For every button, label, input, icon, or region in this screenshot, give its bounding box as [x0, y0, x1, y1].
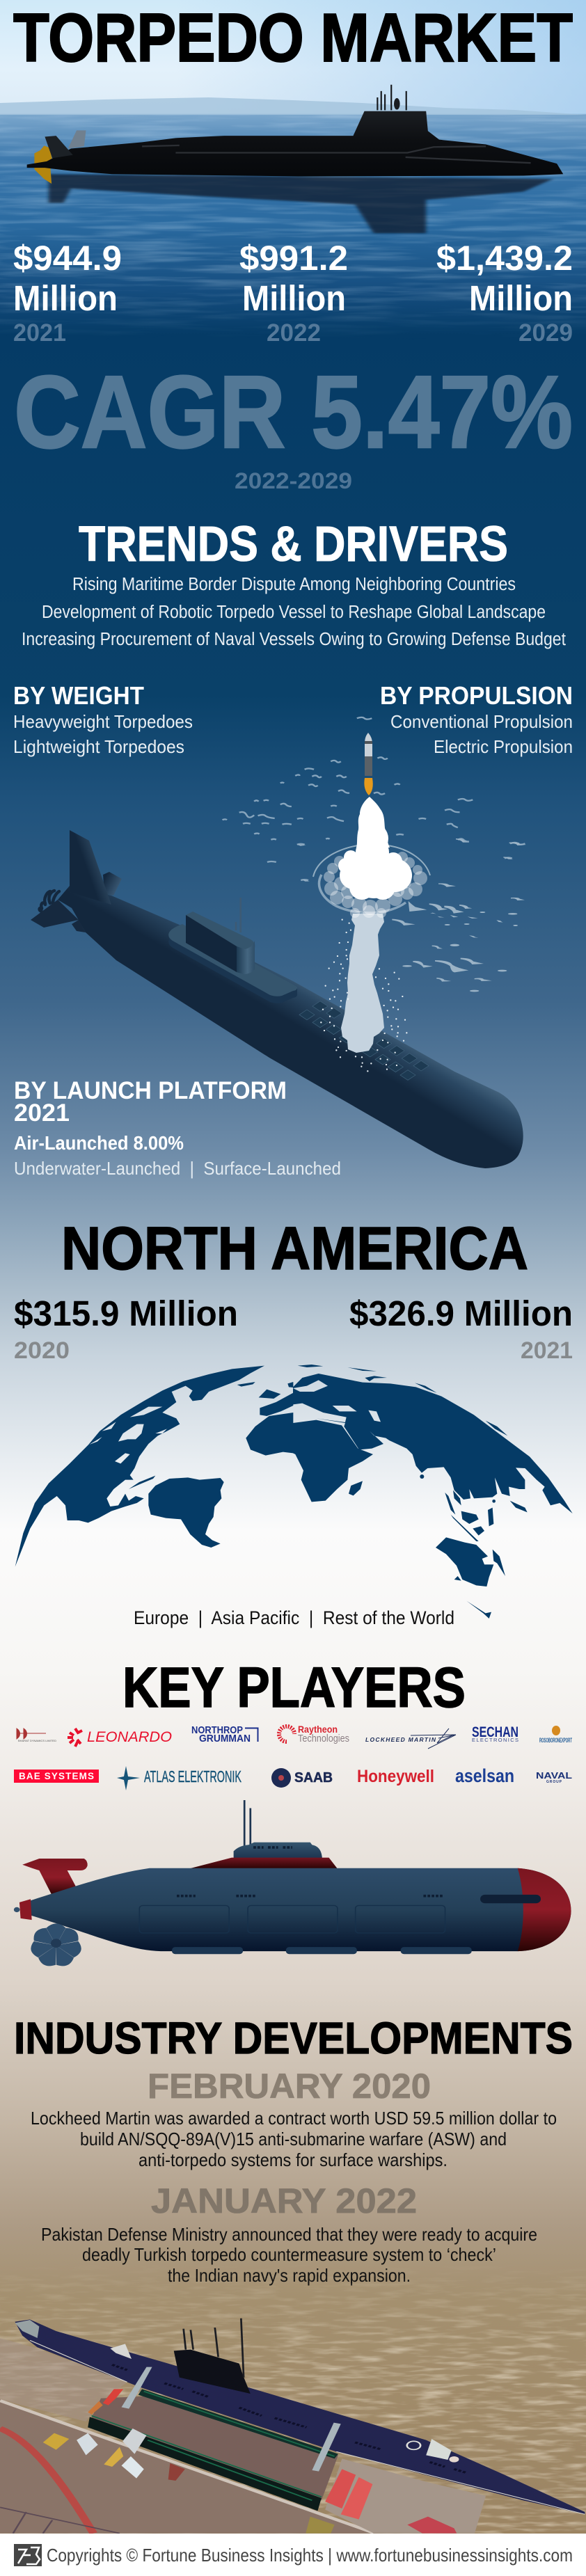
- development February 2020: build AN/SQQ-89A(V)15 anti-submarine warfare (ASW) and: [80, 2129, 507, 2149]
- by propulsion: BY PROPULSION: [380, 681, 573, 710]
- development February 2020: FEBRUARY 2020: [148, 2067, 431, 2106]
- logo: BAE Systems: BAE SYSTEMS: [19, 1771, 94, 1781]
- reflection: [49, 174, 553, 233]
- stat 2021: Million: [13, 278, 118, 318]
- sail: [234, 1843, 322, 1859]
- launch ring: [313, 845, 430, 913]
- large ripple shapes: [296, 838, 526, 992]
- logo: Northrop Grumman: GRUMMAN: [199, 1733, 251, 1744]
- propeller: [29, 1923, 84, 1969]
- trends and drivers heading: TRENDS & DRIVERS: [79, 517, 508, 572]
- logo: Naval Group: [536, 1770, 572, 1784]
- north america 2021 value: [349, 1294, 573, 1364]
- covers: [110, 2344, 132, 2359]
- distant hills: [0, 97, 586, 115]
- by launch platform: [14, 1077, 341, 1179]
- logo: Lockheed Martin: [365, 1728, 456, 1749]
- north america 2020 value: [14, 1294, 238, 1364]
- logo: Raytheon Technologies: [279, 1724, 349, 1744]
- gangways: [122, 2367, 152, 2409]
- logo: Raytheon Technologies: Technologies: [298, 1733, 349, 1744]
- foam water: [325, 2458, 486, 2534]
- inflatable boat: [407, 2517, 457, 2534]
- paving lines: [0, 2507, 120, 2534]
- deck: [168, 932, 297, 1003]
- windows on hull: [112, 2364, 467, 2473]
- hull: [58, 886, 523, 1168]
- red deck: [189, 1858, 338, 1869]
- logo: Bharat Dynamics: [17, 1728, 56, 1742]
- logo: Atlas Elektronik: [117, 1766, 241, 1790]
- north america 2020 value: $315.9 Million: [14, 1294, 238, 1333]
- masts: [377, 85, 406, 110]
- hull: [30, 1868, 571, 1951]
- logo: Honeywell: Honeywell: [357, 1767, 434, 1786]
- footer: [0, 2534, 586, 2576]
- stern cone: [19, 1899, 32, 1920]
- logo: Sechan Electronics: [472, 1724, 518, 1743]
- logo: BAE Systems: [14, 1770, 99, 1783]
- missile hatches: [299, 1001, 429, 1080]
- by propulsion: Conventional Propulsion: [390, 711, 573, 732]
- stat 2021: [13, 239, 122, 347]
- translucent smoke cloud: [324, 852, 427, 918]
- logo: Sechan Electronics: SECHAN: [472, 1724, 518, 1740]
- spray dots: [321, 920, 406, 1071]
- development February 2020: [31, 2067, 557, 2170]
- submarine on the sea surface: [27, 85, 563, 233]
- logo: Saab: [271, 1768, 333, 1788]
- panels and keel fairings: [139, 1905, 445, 1933]
- stat 2021: 2021: [13, 319, 66, 347]
- logo: Atlas Elektronik: ATLAS ELEKTRONIK: [144, 1767, 241, 1786]
- north america heading: NORTH AMERICA: [61, 1215, 528, 1282]
- development January 2022: deadly Turkish torpedo countermeasure system to ‘check’: [82, 2244, 496, 2265]
- logo: Bharat Dynamics: BHARAT DYNAMICS LIMITED: [18, 1739, 56, 1742]
- stat 2022: Million: [242, 278, 346, 318]
- submarine below the launch: [31, 830, 523, 1168]
- trends list: Rising Maritime Border Dispute Among Neighboring Countries: [72, 575, 516, 594]
- development January 2022: the Indian navy's rapid expansion.: [168, 2265, 411, 2286]
- fins: [45, 136, 73, 158]
- stat 2022: [239, 239, 348, 347]
- trends list: [22, 575, 566, 649]
- by propulsion: Electric Propulsion: [434, 736, 573, 757]
- red floats: [325, 2469, 356, 2509]
- propeller blades: [40, 891, 59, 912]
- submarine hull: [15, 2319, 585, 2514]
- hull: [27, 111, 563, 176]
- upper fin: [70, 830, 111, 905]
- logo: Naval Group: NAVAL: [536, 1770, 572, 1781]
- logo: Aselsan: aselsan: [455, 1765, 514, 1786]
- propeller: [34, 145, 52, 184]
- missile launch: [321, 733, 427, 1071]
- development January 2022: [41, 2181, 537, 2286]
- logo: Leonardo: [68, 1728, 172, 1747]
- kiosks and markings: [43, 2433, 69, 2450]
- north america 2021 value: 2021: [521, 1337, 573, 1364]
- stat 2021: $944.9: [13, 239, 122, 278]
- rudder: [22, 1859, 88, 1896]
- other regions: Europe | Asia Pacific | Rest of the World: [134, 1607, 454, 1628]
- by launch platform: BY LAUNCH PLATFORM: [14, 1077, 287, 1104]
- logo: Sechan Electronics: ELECTRONICS: [472, 1737, 518, 1743]
- red painted curve: [0, 2428, 93, 2534]
- masts: [244, 1800, 251, 1847]
- stat 2029: $1,439.2: [436, 239, 573, 278]
- by weight: Lightweight Torpedoes: [13, 736, 184, 757]
- development January 2022: Pakistan Defense Ministry announced that they were ready to acquire: [41, 2224, 537, 2245]
- north america 2021 value: $326.9 Million: [349, 1294, 573, 1333]
- red nose: [518, 1868, 571, 1951]
- logo: Rosoboronexport: [539, 1726, 572, 1744]
- stat 2029: Million: [469, 278, 573, 318]
- by weight: Heavyweight Torpedoes: [13, 711, 193, 732]
- quay edge: [0, 2401, 374, 2533]
- by propulsion: [380, 681, 573, 757]
- logo: Northrop Grumman: [191, 1724, 258, 1744]
- logo: Leonardo: LEONARDO: [87, 1729, 172, 1745]
- conning tower: [174, 2350, 251, 2394]
- upper rear fin: [103, 872, 122, 896]
- stat 2029: 2029: [518, 319, 573, 347]
- wake trail: [341, 914, 384, 1053]
- trends list: Development of Robotic Torpedo Vessel to Reshape Global Landscape: [42, 603, 546, 622]
- dock: [90, 2396, 338, 2500]
- logo: Naval Group: GROUP: [546, 1780, 562, 1784]
- stat 2029: [436, 239, 573, 347]
- flame: [364, 778, 373, 795]
- development February 2020: anti-torpedo systems for surface warships.: [138, 2149, 448, 2170]
- key players heading: KEY PLAYERS: [122, 1656, 466, 1719]
- stat 2022: 2022: [267, 319, 321, 347]
- torpedo missile: [365, 733, 372, 776]
- by launch platform: Underwater-Launched | Surface-Launched: [14, 1158, 341, 1179]
- shallow water by quay: [0, 2338, 127, 2422]
- water surface ripples: [223, 717, 525, 880]
- rudder plate: [31, 900, 79, 928]
- by launch platform: 2021: [14, 1099, 70, 1127]
- by weight: BY WEIGHT: [13, 681, 144, 710]
- north america 2020 value: 2020: [14, 1337, 70, 1364]
- smoke cloud: [338, 823, 412, 900]
- illustrated submarine: [14, 1800, 571, 1969]
- stat 2022: $991.2: [239, 239, 348, 278]
- icon: Fortune Business Insights logo: [14, 2544, 42, 2566]
- logo: Northrop Grumman: NORTHROP: [191, 1724, 243, 1736]
- world globe map: [15, 1365, 573, 1619]
- smoke column: [356, 797, 390, 848]
- quay: [0, 2399, 377, 2534]
- CAGR: 2022-2029: [235, 468, 352, 493]
- docked submarine photograph: [0, 2319, 585, 2534]
- water texture: [0, 2261, 586, 2534]
- logo: Raytheon Technologies: Raytheon: [298, 1724, 338, 1735]
- sail: [186, 912, 255, 951]
- by launch platform: Air-Launched 8.00%: [14, 1132, 184, 1154]
- logo: Lockheed Martin: LOCKHEED MARTIN: [365, 1736, 436, 1743]
- by weight: [13, 681, 193, 757]
- logo: Saab: SAAB: [294, 1770, 333, 1786]
- mast: [236, 898, 241, 932]
- company logos: [14, 1724, 572, 1790]
- development January 2022: JANUARY 2022: [151, 2181, 417, 2220]
